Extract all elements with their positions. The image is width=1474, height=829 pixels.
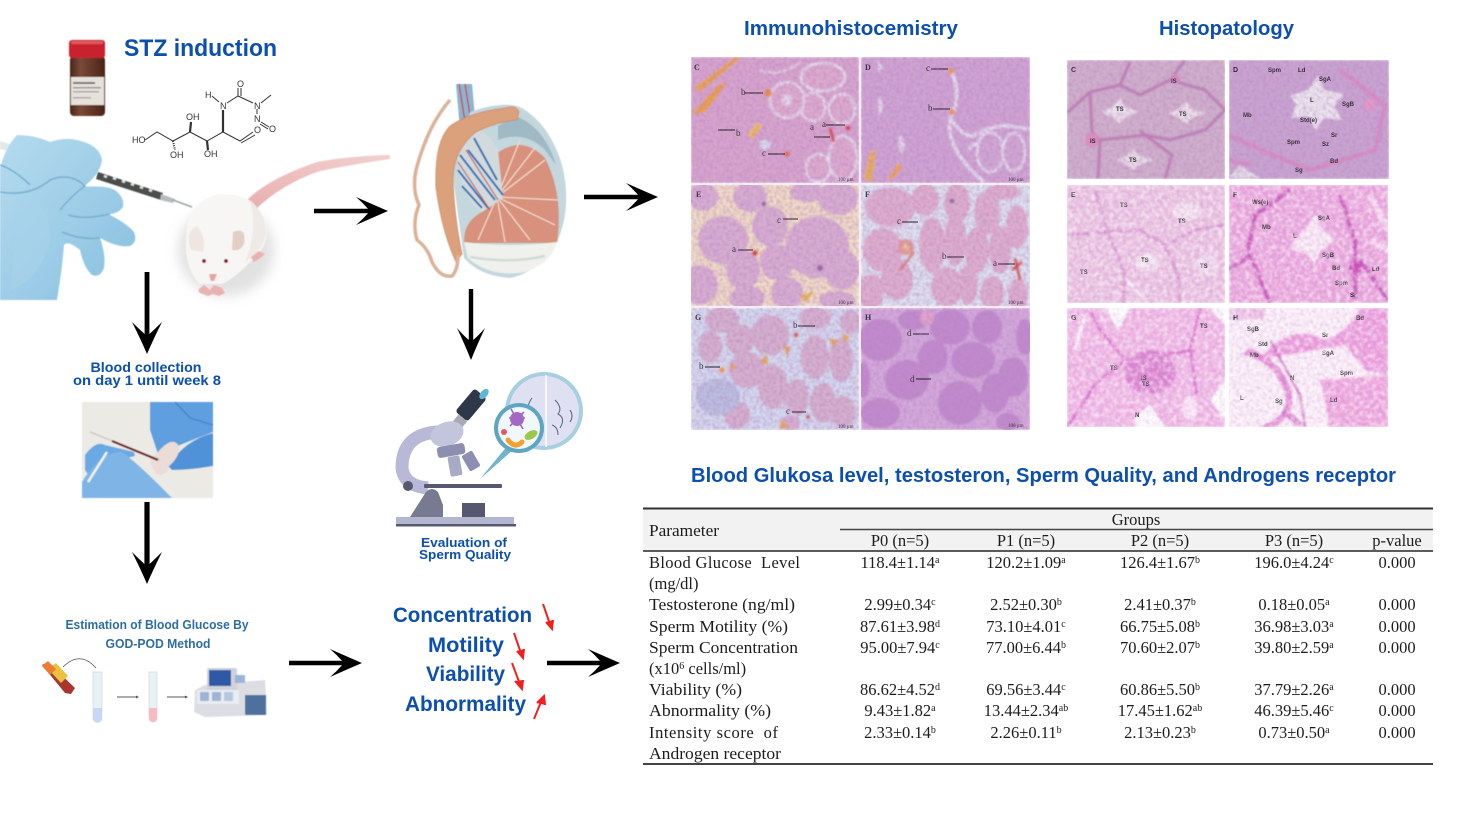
table row labels: Intensity score of bbox=[649, 723, 778, 742]
illustration: testis anatomy bbox=[415, 84, 566, 278]
micrograph C: b bbox=[741, 87, 746, 97]
micrograph C: TS bbox=[1179, 112, 1187, 118]
micrograph H: Sg bbox=[1275, 399, 1283, 405]
table values: ab bbox=[1193, 703, 1202, 714]
table values: a bbox=[1329, 619, 1334, 630]
micrograph C bbox=[691, 57, 859, 183]
micrograph H: H bbox=[865, 313, 872, 322]
table row labels: 6 bbox=[679, 661, 684, 672]
table values: 0.18±0.05 bbox=[1258, 595, 1325, 614]
table values: 2.33±0.14 bbox=[864, 723, 931, 742]
table row labels: Androgen receptor bbox=[649, 744, 782, 763]
table row labels: (mg/dl) bbox=[649, 574, 698, 593]
table values: 0.000 bbox=[1378, 617, 1416, 636]
micrograph D: Bd bbox=[1330, 159, 1338, 165]
table row labels: Abnormality (%) bbox=[649, 701, 771, 720]
chemical structure: streptozotocin: O bbox=[254, 125, 261, 135]
heading: STZ induction: STZ induction bbox=[124, 35, 277, 62]
micrograph H: SgB bbox=[1247, 327, 1260, 333]
table row labels: Sperm Motility (%) bbox=[649, 617, 788, 636]
table header: P3 (n=5) bbox=[1265, 531, 1323, 550]
chemical structure: streptozotocin: H bbox=[205, 90, 212, 100]
micrograph G: G bbox=[1071, 315, 1077, 322]
table values: 66.75±5.08 bbox=[1120, 617, 1195, 636]
icon: blood analyzer machine bbox=[194, 668, 267, 717]
table values: b bbox=[1195, 682, 1200, 693]
table values: ab bbox=[1059, 703, 1068, 714]
panel: histopathology micrographs bbox=[1067, 60, 1389, 427]
illustration: gloved hand with syringe bbox=[0, 135, 192, 300]
micrograph E: TS bbox=[1200, 264, 1208, 270]
micrograph F: Mb bbox=[1262, 225, 1271, 231]
panel: immunohistochemistry micrographs bbox=[682, 57, 1034, 431]
red arrows: direction of change bbox=[512, 604, 553, 719]
table values: b bbox=[1191, 725, 1196, 736]
chemical structure: streptozotocin: OH bbox=[186, 112, 200, 122]
chemical structure: streptozotocin: N bbox=[220, 101, 226, 111]
heading: immunohistochemistry: Immunohistocemistry bbox=[744, 17, 959, 40]
micrograph H: d bbox=[910, 374, 915, 384]
micrograph C: 100 µm bbox=[838, 178, 854, 183]
text: blood collection bbox=[73, 359, 221, 388]
micrograph F: Ld bbox=[1372, 267, 1380, 273]
table values: 126.4±1.67 bbox=[1120, 553, 1195, 572]
table header: P1 (n=5) bbox=[997, 531, 1055, 550]
table values: 2.99±0.34 bbox=[864, 595, 931, 614]
micrograph G bbox=[1067, 308, 1225, 427]
table values: 77.00±6.44 bbox=[986, 638, 1061, 657]
micrograph E: TS bbox=[1120, 203, 1128, 209]
micrograph C: TS bbox=[1116, 107, 1124, 113]
table values: 2.26±0.11 bbox=[990, 723, 1057, 742]
micrograph D: Sz bbox=[1322, 142, 1329, 148]
micrograph G: G bbox=[695, 313, 701, 322]
table row labels bbox=[649, 553, 800, 763]
table values: 13.44±2.34 bbox=[984, 701, 1059, 720]
table values: a bbox=[1325, 725, 1330, 736]
micrograph E: TS bbox=[1178, 219, 1186, 225]
micrograph H: Spm bbox=[1340, 371, 1353, 377]
heading: table title: Blood Glukosa level, testosteron, Sperm Quality, and Androgens receptor bbox=[691, 465, 1396, 487]
table values: 0.000 bbox=[1378, 553, 1416, 572]
micrograph F: Ws(e) bbox=[1252, 200, 1268, 206]
list: sperm quality outcomes: Concentration bbox=[393, 604, 532, 627]
micrograph F: SgB bbox=[1322, 253, 1335, 259]
arrow: down to blood collection bbox=[132, 272, 162, 354]
table values: 196.0±4.24 bbox=[1254, 553, 1329, 572]
chemical structure: streptozotocin: N bbox=[254, 101, 260, 111]
table values: 60.86±5.50 bbox=[1120, 680, 1195, 699]
table values: a bbox=[1329, 640, 1334, 651]
micrograph G bbox=[691, 307, 860, 431]
micrograph C bbox=[1067, 60, 1225, 179]
micrograph D: SgA bbox=[1319, 77, 1332, 83]
micrograph H: H bbox=[1233, 315, 1238, 322]
micrograph F: F bbox=[1233, 192, 1238, 199]
list: sperm quality outcomes: Viability bbox=[426, 663, 505, 686]
icon: STZ reagent bottle bbox=[69, 40, 105, 116]
table row labels: Testosterone (ng/ml) bbox=[649, 595, 795, 614]
table values: 95.00±7.94 bbox=[860, 638, 935, 657]
table values: a bbox=[1061, 555, 1066, 566]
table values: 17.45±1.62 bbox=[1118, 701, 1193, 720]
table values: 0.000 bbox=[1378, 595, 1416, 614]
micrograph D: b bbox=[928, 103, 933, 113]
table header: P0 (n=5) bbox=[871, 531, 929, 550]
chemical structure: streptozotocin: HO bbox=[132, 135, 146, 145]
table values: b bbox=[1195, 619, 1200, 630]
micrograph D bbox=[1229, 60, 1389, 179]
table values: 9.43±1.82 bbox=[864, 701, 931, 720]
micrograph F: 100 µm bbox=[1008, 301, 1024, 306]
micrograph H: L bbox=[1240, 396, 1244, 402]
micrograph H: N bbox=[1290, 376, 1294, 382]
micrograph D bbox=[861, 57, 1030, 183]
micrograph D: Spm bbox=[1287, 140, 1300, 146]
micrograph G: TS bbox=[1200, 324, 1208, 330]
table: blood glucose, testosterone, sperm quality and androgen receptor bbox=[643, 508, 1433, 764]
table values: c bbox=[1061, 682, 1066, 693]
table row labels: (x10 bbox=[649, 659, 679, 678]
table values: 86.62±4.52 bbox=[860, 680, 935, 699]
micrograph F: SgA bbox=[1318, 216, 1331, 222]
table header: Groups bbox=[1112, 510, 1160, 529]
arrow: testis to histology bbox=[584, 183, 658, 211]
table values: a bbox=[1329, 682, 1334, 693]
micrograph H: SgA bbox=[1322, 351, 1335, 357]
table values: b bbox=[1191, 597, 1196, 608]
micrograph F: Bd bbox=[1332, 266, 1340, 272]
table values: 0.000 bbox=[1378, 723, 1416, 742]
micrograph D: L bbox=[1310, 98, 1314, 104]
icon: microscope with sperm view bbox=[396, 372, 583, 526]
illustration: glucose assay tubes bbox=[42, 659, 188, 722]
micrograph F: a bbox=[993, 258, 997, 268]
table values: c bbox=[1329, 555, 1334, 566]
micrograph F: Sr bbox=[1350, 293, 1357, 299]
micrograph C: b bbox=[736, 128, 741, 138]
table header: P2 (n=5) bbox=[1131, 531, 1189, 550]
table row labels: Sperm Concentration bbox=[649, 638, 798, 657]
micrograph F bbox=[1229, 185, 1388, 303]
table values: 118.4±1.14 bbox=[861, 553, 935, 572]
micrograph C: a bbox=[810, 122, 814, 132]
micrograph E: E bbox=[1071, 192, 1076, 199]
table values: b bbox=[1057, 597, 1062, 608]
table values: 73.10±4.01 bbox=[986, 617, 1061, 636]
table row labels: Blood Glucose Level bbox=[649, 553, 800, 572]
arrow: down to glucose estimation bbox=[132, 502, 162, 584]
table values: d bbox=[935, 682, 940, 693]
micrograph D: c bbox=[926, 63, 930, 73]
micrograph H: d bbox=[907, 328, 912, 338]
table values: a bbox=[931, 703, 936, 714]
micrograph H: Bd bbox=[1356, 316, 1364, 322]
micrograph G: b bbox=[793, 320, 798, 330]
table values: 0.73±0.50 bbox=[1258, 723, 1325, 742]
heading: histopathology: Histopatology bbox=[1159, 17, 1295, 40]
micrograph C: C bbox=[694, 63, 700, 72]
table values: c bbox=[1329, 703, 1334, 714]
table values: 37.79±2.26 bbox=[1254, 680, 1329, 699]
table values bbox=[860, 553, 1416, 742]
text: estimation of blood glucose: Estimation of Blood Glucose By bbox=[66, 618, 249, 632]
micrograph D: 100 µm bbox=[1008, 178, 1024, 183]
micrograph D: Std(e) bbox=[1300, 118, 1317, 124]
micrograph E: 100 µm bbox=[838, 301, 854, 306]
table header bbox=[649, 510, 1422, 550]
table values: c bbox=[1061, 619, 1066, 630]
chemical structure: streptozotocin: OH bbox=[204, 149, 218, 159]
micrograph H: 100 µm bbox=[1008, 424, 1024, 429]
micrograph D: Sg bbox=[1295, 168, 1303, 174]
table values: b bbox=[931, 725, 936, 736]
micrograph H: Ld bbox=[1330, 398, 1338, 404]
micrograph G: TS bbox=[1110, 366, 1118, 372]
micrograph G: N bbox=[1135, 413, 1139, 419]
table values: 70.60±2.07 bbox=[1120, 638, 1195, 657]
illustration: white mouse bbox=[178, 155, 390, 296]
list: sperm quality outcomes: Motility bbox=[428, 634, 504, 657]
micrograph E: c bbox=[777, 215, 781, 225]
table values: b bbox=[1057, 725, 1062, 736]
table values: c bbox=[935, 640, 940, 651]
micrograph C: TS bbox=[1129, 158, 1137, 164]
micrograph F: b bbox=[942, 251, 947, 261]
micrograph G: IS bbox=[1141, 376, 1147, 382]
micrograph D: D bbox=[1233, 67, 1238, 74]
text: estimation of blood glucose bbox=[66, 618, 249, 651]
table values: 120.2±1.09 bbox=[986, 553, 1061, 572]
text: evaluation of sperm quality: Sperm Quality bbox=[419, 547, 512, 562]
micrograph H bbox=[1229, 308, 1388, 427]
text: blood collection: Blood collection bbox=[90, 359, 202, 375]
list: sperm quality outcomes: Abnormality bbox=[405, 693, 526, 716]
micrograph C: c bbox=[762, 148, 766, 158]
table values: c bbox=[931, 597, 936, 608]
micrograph E bbox=[691, 185, 859, 306]
arrow: glucose to results bbox=[289, 649, 362, 677]
chemical structure: streptozotocin: N bbox=[254, 114, 260, 124]
micrograph G: c bbox=[786, 406, 790, 416]
table values: a bbox=[1325, 597, 1330, 608]
table row labels: cells/ml) bbox=[684, 659, 746, 678]
micrograph H: Sr bbox=[1322, 333, 1329, 339]
micrograph D: SgB bbox=[1342, 102, 1355, 108]
micrograph D: Ld bbox=[1298, 68, 1306, 74]
table values: a bbox=[935, 555, 940, 566]
micrograph E: a bbox=[732, 244, 736, 254]
text: evaluation of sperm quality bbox=[419, 535, 512, 562]
table values: 2.52±0.30 bbox=[990, 595, 1057, 614]
chemical structure: streptozotocin: OH bbox=[170, 150, 184, 160]
micrograph G: TS bbox=[1142, 382, 1150, 388]
table header: Parameter bbox=[649, 521, 720, 540]
table values: 0.000 bbox=[1378, 701, 1416, 720]
text: estimation of blood glucose: GOD-POD Method bbox=[106, 637, 210, 651]
micrograph G: b bbox=[699, 361, 704, 371]
table values: 0.000 bbox=[1378, 638, 1416, 657]
table values: 46.39±5.46 bbox=[1254, 701, 1329, 720]
table values: 2.13±0.23 bbox=[1124, 723, 1191, 742]
chemical structure: streptozotocin bbox=[132, 79, 276, 160]
micrograph F: F bbox=[865, 190, 870, 199]
table values: 0.000 bbox=[1378, 680, 1416, 699]
micrograph D: Spm bbox=[1268, 68, 1281, 74]
micrograph F bbox=[858, 183, 1030, 311]
table values: 87.61±3.98 bbox=[860, 617, 935, 636]
chemical structure: streptozotocin: O bbox=[237, 79, 244, 89]
list: sperm quality outcomes bbox=[393, 604, 532, 716]
micrograph E: TS bbox=[1080, 270, 1088, 276]
text: blood collection: on day 1 until week 8 bbox=[73, 372, 221, 388]
micrograph E: E bbox=[696, 190, 701, 199]
micrograph D: Mb bbox=[1243, 113, 1252, 119]
micrograph H bbox=[856, 308, 1034, 431]
micrograph F: Spm bbox=[1335, 281, 1348, 287]
table row labels: Viability (%) bbox=[649, 680, 742, 699]
table values: 2.41±0.37 bbox=[1124, 595, 1191, 614]
table values: d bbox=[935, 619, 940, 630]
micrograph D: D bbox=[865, 63, 871, 72]
table values: 36.98±3.03 bbox=[1254, 617, 1329, 636]
arrow: testis to microscope bbox=[457, 289, 485, 360]
micrograph C: C bbox=[1071, 67, 1076, 74]
arrow: results to table bbox=[547, 649, 620, 677]
micrograph C: IS bbox=[1171, 79, 1177, 85]
table values: b bbox=[1195, 555, 1200, 566]
micrograph H: Std bbox=[1258, 342, 1268, 348]
table values: 69.56±3.44 bbox=[986, 680, 1061, 699]
micrograph F: c bbox=[897, 216, 901, 226]
micrograph H: Mb bbox=[1250, 353, 1259, 359]
micrograph E bbox=[1067, 185, 1225, 303]
micrograph D: Sr bbox=[1331, 133, 1338, 139]
text: evaluation of sperm quality: Evaluation of bbox=[421, 535, 508, 550]
micrograph E: TS bbox=[1141, 258, 1149, 264]
micrograph F: L bbox=[1293, 234, 1297, 240]
table values: 39.80±2.59 bbox=[1254, 638, 1329, 657]
micrograph C: IS bbox=[1090, 139, 1096, 145]
chemical structure: streptozotocin: O bbox=[269, 124, 276, 134]
table header: p-value bbox=[1372, 531, 1422, 550]
arrow: mouse to testis bbox=[314, 197, 388, 225]
table values: b bbox=[1195, 640, 1200, 651]
micrograph C: a bbox=[822, 119, 826, 129]
photo: blood sampling from mouse bbox=[82, 402, 213, 498]
micrograph G: 100 µm bbox=[838, 425, 854, 430]
table values: b bbox=[1061, 640, 1066, 651]
